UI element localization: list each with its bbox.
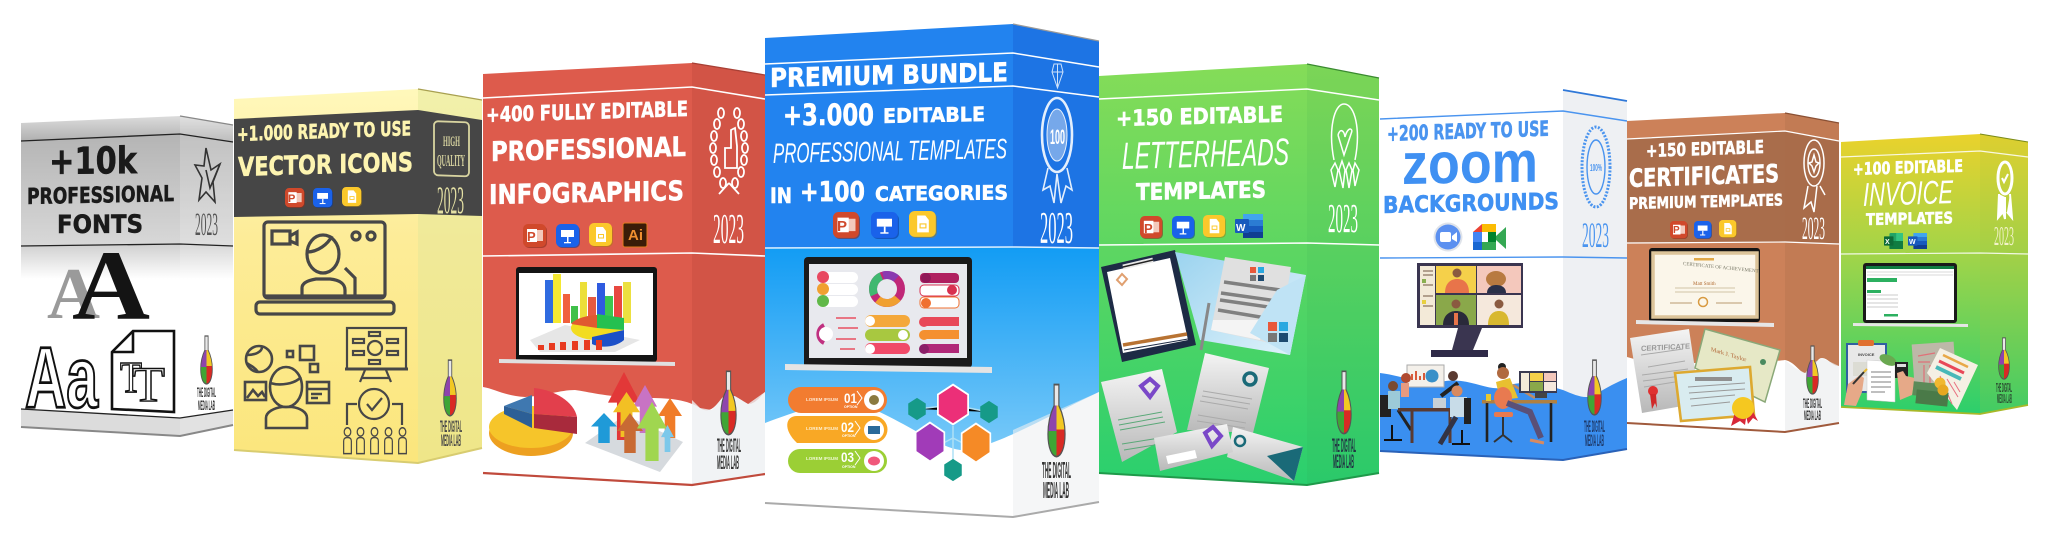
- infographic: product box line-up: THE DIGITAL: [1803, 395, 1822, 411]
- option 01: [788, 387, 887, 413]
- option 03: OPTION: [842, 465, 856, 469]
- box: +10k professional fonts: 2023: [195, 207, 218, 243]
- box: zoom backgrounds: [1380, 90, 1627, 460]
- icon: large and small serif A: A: [47, 253, 100, 334]
- heading: fully editable: +400 FULLY EDITABLE: [486, 97, 688, 127]
- infographic: product box line-up: THE DIGITAL: [1332, 436, 1356, 457]
- icons: software row: P: [527, 229, 536, 244]
- stamp: high quality: [434, 121, 469, 176]
- box: certificates: 2023: [1802, 211, 1825, 247]
- seal: 100 percent: 100%: [1590, 163, 1602, 174]
- icons: software row: P: [1673, 225, 1680, 236]
- icons: software row: [523, 223, 647, 248]
- infographic: product box line-up: THE DIGITAL: [440, 417, 462, 436]
- box: letterheads: [1099, 64, 1379, 485]
- icon: teacher on laptop: [256, 222, 394, 314]
- heading: letterheads: LETTERHEADS: [1122, 132, 1289, 178]
- box: premium bundle: 2023: [1040, 203, 1073, 253]
- option 01: LOREM IPSUM: [806, 397, 838, 402]
- box: vector icons: 2023: [437, 179, 464, 222]
- icon: outlined Aa: Aa: [25, 330, 99, 426]
- icons: software row: [1140, 214, 1263, 239]
- laptop with certificate: Matt Smith: [1693, 282, 1716, 287]
- heading: 3.000: +3.000: [783, 98, 874, 132]
- heading: in: IN: [770, 184, 792, 208]
- pie chart: [489, 388, 577, 456]
- icon: heart badge with stars: [1331, 104, 1359, 188]
- infographic: product box line-up: THE DIGITAL: [1042, 457, 1071, 483]
- icon: large and small serif A: A: [72, 230, 150, 341]
- heading: +10k: +10k: [49, 139, 138, 183]
- box: premium bundle: [765, 24, 1099, 517]
- icon: zoom app: [1434, 222, 1462, 252]
- logo: the digital media lab: [440, 360, 462, 450]
- icons: powerpoint keynote slides: P: [288, 193, 295, 205]
- heading: editable: +150 EDITABLE: [1646, 137, 1764, 162]
- stamp: high quality: HIGH: [443, 134, 460, 150]
- option 01: OPTION: [844, 405, 858, 409]
- option 02: OPTION: [842, 434, 856, 438]
- infographic: product box line-up: MEDIA LAB: [1043, 477, 1069, 503]
- icons: software row: P: [1144, 221, 1153, 236]
- icons: excel and word: [1884, 233, 1927, 249]
- icon: person with ideas: [245, 346, 329, 428]
- heading: editable: +100 EDITABLE: [1853, 157, 1963, 180]
- icons: excel and word: X: [1885, 239, 1890, 246]
- box: certificates: [1627, 113, 1839, 432]
- icons: software row: W: [1236, 223, 1246, 234]
- icon: google meet: [1473, 224, 1506, 250]
- heading: premium bundle: PREMIUM BUNDLE: [770, 58, 1008, 94]
- letterhead sheets: [1101, 353, 1269, 462]
- option 03: LOREM IPSUM: [806, 456, 838, 461]
- box: vector icons: QUALITY: [437, 151, 465, 170]
- heading: professional: PROFESSIONAL: [27, 182, 174, 210]
- monitor: video call: [1417, 263, 1523, 357]
- certificate cards: [1630, 329, 1780, 426]
- laptop with certificate: [1636, 248, 1774, 327]
- heading: zoom: zoom: [1402, 130, 1538, 197]
- heading: certificates: CERTIFICATES: [1629, 159, 1779, 193]
- option 01: 01: [844, 390, 857, 406]
- option 03: [788, 449, 887, 473]
- icons: powerpoint keynote slides: [285, 187, 362, 208]
- box: zoom backgrounds: 2023: [1582, 215, 1609, 255]
- icon: rosette: [1998, 162, 2012, 219]
- icon: team with check: [344, 389, 406, 454]
- heading: professional templates: PROFESSIONAL TEMPLATES: [773, 133, 1007, 169]
- logo: the digital media lab: [1332, 371, 1356, 473]
- heading: ready to use: +200 READY TO USE: [1387, 117, 1549, 146]
- infographic: product box line-up: MEDIA LAB: [198, 397, 215, 413]
- infographic: product box line-up: MEDIA LAB: [1333, 452, 1354, 473]
- heading: professional: PROFESSIONAL: [491, 132, 686, 168]
- logo: the digital media lab: [1803, 346, 1822, 423]
- heading: fonts: FONTS: [57, 210, 143, 239]
- white wave base: [483, 387, 765, 485]
- icons: excel and word: W: [1909, 239, 1916, 246]
- logo: the digital media lab: [1042, 384, 1071, 503]
- icon: font file: T: [120, 353, 142, 402]
- laptop with infographic templates: [785, 257, 992, 373]
- heading: templates: TEMPLATES: [1866, 208, 1953, 229]
- icon: font file: T: [132, 356, 165, 412]
- infographic: product box line-up: THE DIGITAL: [197, 384, 216, 400]
- heading: backgrounds: BACKGROUNDS: [1383, 189, 1559, 219]
- white wave base: [1627, 357, 1839, 432]
- icon: diamond: [1052, 64, 1063, 88]
- icons: software row: P: [837, 218, 847, 235]
- box: vector icons: [234, 89, 482, 463]
- invoice illustration: [1844, 340, 1978, 410]
- option 03: 03: [841, 449, 854, 465]
- certificate cards: CERTIFICATE: [1641, 342, 1690, 353]
- infographic: product box line-up: THE DIGITAL: [717, 436, 741, 457]
- hexagon diagram: [908, 385, 998, 481]
- box: invoice templates: [1841, 134, 2028, 414]
- certificate cards: Mark J. Taylor: [1711, 347, 1746, 364]
- box: professional infographics: 2023: [713, 207, 744, 253]
- icon: thumbs up wreath: [710, 108, 748, 194]
- heading: vector icons: VECTOR ICONS: [238, 148, 413, 183]
- logo: the digital media lab: [197, 336, 216, 413]
- infographic: product box line-up: THE DIGITAL: [1584, 417, 1605, 436]
- rising arrows: [585, 372, 683, 472]
- clipboard: [1101, 250, 1196, 362]
- heading: invoice: INVOICE: [1863, 173, 1954, 213]
- icons: software row: [833, 211, 937, 239]
- box: +10k professional fonts: [21, 116, 233, 436]
- blue wave base: [1380, 373, 1627, 460]
- logo: the digital media lab: [1996, 338, 2012, 406]
- heading: premium templates: PREMIUM TEMPLATES: [1629, 190, 1783, 213]
- infographic: product box line-up: MEDIA LAB: [1804, 407, 1821, 423]
- infographic: product box line-up: MEDIA LAB: [441, 431, 461, 450]
- meeting scene: [1380, 363, 1557, 444]
- logo: the digital media lab: [717, 371, 741, 474]
- option 02: [787, 416, 887, 443]
- icons: software row: Ai: [628, 227, 643, 244]
- laptop with spreadsheet: [1853, 263, 1968, 327]
- option 02: 02: [841, 419, 854, 435]
- icon: award ribbon: [1804, 140, 1825, 212]
- heading: editable: +150 EDITABLE: [1116, 103, 1283, 132]
- white base shape: [765, 392, 1099, 517]
- icon: star with check: [195, 148, 220, 202]
- box: invoice templates: 2023: [1994, 221, 2014, 251]
- box: professional infographics: [483, 63, 765, 485]
- infographic: product box line-up: MEDIA LAB: [717, 453, 739, 474]
- envelopes: [1154, 424, 1303, 481]
- icons: software row: [1670, 220, 1737, 239]
- heading: ready to use: +1.000 READY TO USE: [237, 116, 411, 146]
- heading: infographics: INFOGRAPHICS: [489, 176, 684, 211]
- heading: categories: CATEGORIES: [875, 180, 1008, 206]
- seal: 100 percent: [1582, 127, 1610, 207]
- seal: best quality: 100: [1050, 126, 1065, 149]
- laptop with chart: [499, 267, 675, 366]
- laptop with certificate: CERTIFICATE OF ACHIEVEMENT: [1683, 262, 1759, 275]
- icon: font file: [112, 331, 174, 412]
- box: letterheads: 2023: [1328, 195, 1358, 241]
- heading: templates: TEMPLATES: [1136, 177, 1266, 206]
- heading: +100: +100: [800, 175, 865, 208]
- icon: presentation board: [345, 328, 408, 382]
- invoice illustration: INVOICE: [1858, 352, 1875, 357]
- heading: editable: EDITABLE: [883, 102, 985, 128]
- seal: best quality: [1042, 98, 1072, 203]
- option 02: LOREM IPSUM: [806, 426, 838, 431]
- infographic: product box line-up: MEDIA LAB: [1585, 431, 1604, 450]
- folder and letter: [1175, 252, 1306, 355]
- logo: the digital media lab: [1584, 360, 1605, 450]
